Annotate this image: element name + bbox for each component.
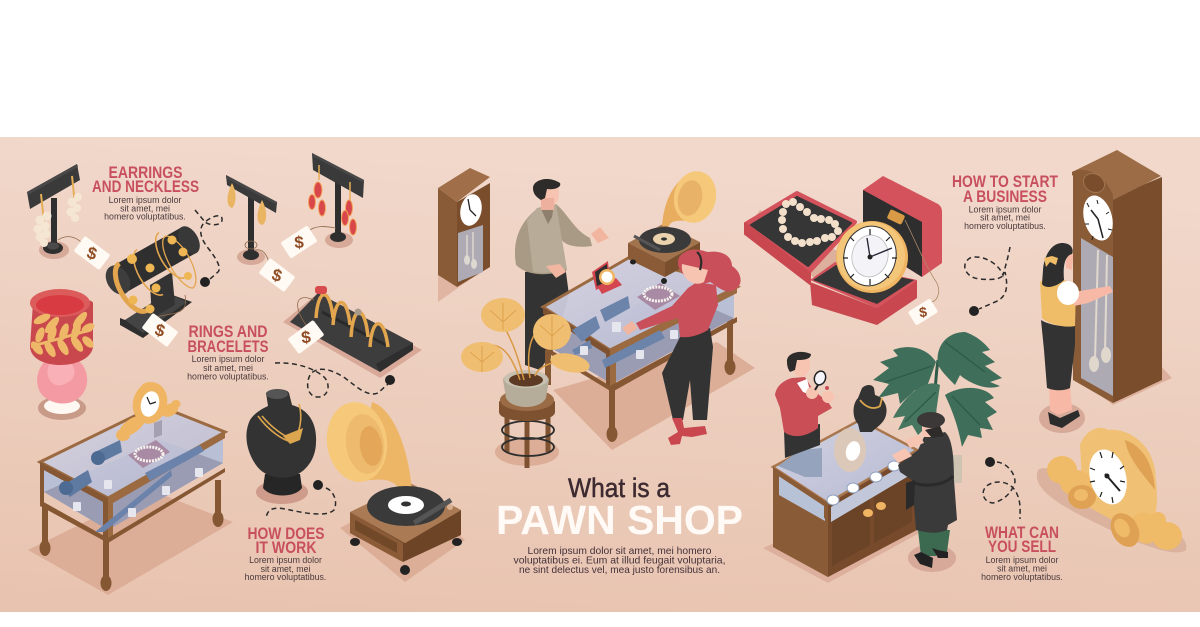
heading: how to start a business: HOW TO START — [952, 173, 1058, 191]
man with loupe — [775, 352, 834, 458]
heading: how does it work — [245, 525, 326, 582]
earring stand with gold drops — [226, 175, 277, 265]
heading: how does it work: HOW DOES — [248, 525, 324, 543]
jewellery boxes with pearls and pocket watch — [744, 176, 942, 325]
heading: what can you sell: sit amet, mei — [997, 564, 1047, 574]
heading: earrings and neckless: sit amet, mei — [120, 204, 170, 214]
monstera plant — [873, 332, 1002, 483]
heading: what can you sell: YOU SELL — [988, 538, 1056, 556]
title: what is a pawn shop — [496, 473, 743, 576]
price tag: pearl earrings — [58, 235, 111, 271]
title: what is a pawn shop: What is a — [568, 473, 671, 503]
price tag: pocket watch: $ — [918, 304, 928, 320]
heading: how to start a business: homero voluptatibus. — [964, 221, 1046, 231]
wall clock: small pendulum — [438, 168, 490, 302]
heading: how to start a business: Lorem ipsum dolor — [969, 204, 1041, 214]
heading: what can you sell: homero voluptatibus. — [981, 572, 1063, 582]
heading: rings and bracelets: homero voluptatibus. — [187, 372, 269, 382]
ring holder — [283, 286, 422, 378]
heading: how does it work: Lorem ipsum dolor — [249, 555, 322, 565]
potted plant on stool — [461, 298, 591, 468]
heading: how to start a business: sit amet, mei — [980, 212, 1030, 222]
heading: how to start a business: A BUSINESS — [963, 188, 1047, 206]
heading: rings and bracelets: Lorem ipsum dolor — [192, 354, 264, 364]
heading: how to start a business — [952, 173, 1058, 231]
price tag: bracelets — [141, 295, 186, 348]
ornate mantel clock — [1037, 428, 1186, 552]
gramophone: center — [628, 167, 721, 284]
title: what is a pawn shop: voluptatibus ei. Eum at illud feugait voluptaria, — [514, 556, 726, 566]
price tag: gold earrings — [245, 241, 296, 293]
heading: earrings and neckless: homero voluptatibus. — [104, 212, 186, 222]
dashed path: earrings — [195, 210, 222, 287]
heading: rings and bracelets: sit amet, mei — [203, 363, 253, 373]
heading: rings and bracelets: RINGS AND — [188, 323, 268, 341]
title: what is a pawn shop: ne sint delectus vel, mea justo forensibus an. — [519, 565, 720, 576]
background panel — [0, 137, 1200, 612]
price tag: red earrings: $ — [294, 233, 305, 252]
customer woman — [622, 250, 741, 445]
heading: how does it work: homero voluptatibus. — [245, 572, 326, 582]
table lamp — [29, 289, 96, 420]
man in dark coat — [892, 412, 957, 572]
price tag: rings — [287, 298, 326, 356]
small necklace bust — [854, 385, 887, 432]
heading: what can you sell: WHAT CAN — [985, 524, 1059, 542]
price tag: gold earrings: $ — [270, 265, 285, 286]
price tag: pearl earrings: $ — [85, 243, 100, 264]
price tag: rings: $ — [300, 327, 312, 348]
necklace bust — [246, 389, 316, 504]
heading: how does it work: sit amet, mei — [261, 564, 310, 574]
heading: what can you sell: Lorem ipsum dolor — [986, 555, 1058, 565]
heading: earrings and neckless — [92, 164, 199, 222]
title: what is a pawn shop: PAWN SHOP — [496, 497, 743, 543]
heading: what can you sell — [981, 524, 1063, 582]
small pocket watch box — [592, 261, 622, 294]
grandfather clock — [1072, 150, 1172, 405]
woman at clock — [1039, 243, 1113, 433]
gramophone: large — [322, 398, 465, 582]
heading: rings and bracelets — [187, 323, 269, 382]
ornate clock on left case — [116, 378, 181, 441]
heading: how does it work: IT WORK — [256, 539, 317, 557]
dashed path: how does it work — [266, 480, 336, 518]
price tag: red earrings — [280, 225, 336, 260]
earring stand with pearls — [27, 164, 82, 259]
display case: center — [543, 257, 755, 450]
heading: earrings and neckless: EARRINGS — [108, 164, 182, 182]
price tag: bracelets: $ — [153, 320, 168, 341]
heading: earrings and neckless: Lorem ipsum dolor — [109, 195, 181, 205]
display case: left — [28, 405, 233, 595]
dashed path: what can you sell — [983, 457, 1020, 519]
bracelet holder — [101, 223, 204, 338]
dashed path: how to start — [965, 247, 1010, 316]
heading: earrings and neckless: AND NECKLESS — [92, 178, 199, 196]
title: what is a pawn shop: Lorem ipsum dolor sit amet, mei homero — [528, 546, 712, 557]
earring stand with red drops — [308, 153, 364, 248]
dashed path: rings — [275, 363, 395, 397]
heading: rings and bracelets: BRACELETS — [188, 338, 268, 356]
display case: right — [763, 420, 925, 583]
shop owner man — [515, 179, 609, 370]
price tag: pocket watch — [907, 298, 939, 327]
